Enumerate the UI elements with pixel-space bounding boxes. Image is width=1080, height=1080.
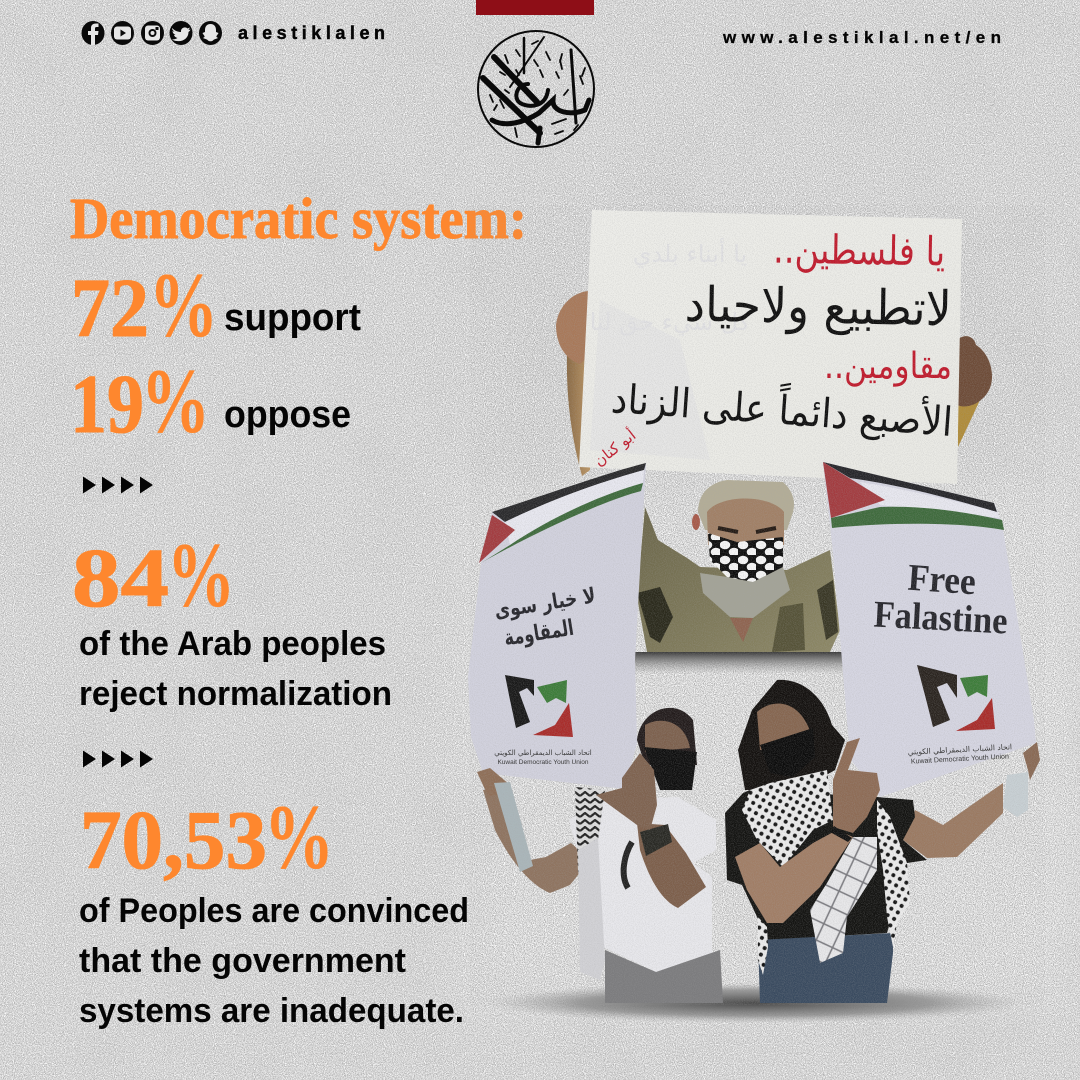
icon: snapchat bbox=[199, 21, 222, 45]
stat: 72% support bbox=[71, 254, 361, 356]
stat: 70,53% bbox=[79, 786, 469, 1030]
icon: facebook bbox=[82, 21, 104, 45]
face bbox=[757, 703, 814, 750]
photo collage: protesters bbox=[468, 205, 1045, 1023]
placard: right, Free Falastine: Free bbox=[906, 557, 977, 603]
jeans bbox=[758, 933, 893, 1003]
keffiyeh mask bbox=[708, 533, 783, 582]
stat: 19% oppose bbox=[70, 350, 351, 452]
forearm bbox=[637, 823, 706, 908]
stat: 84%: reject normalization bbox=[79, 675, 392, 713]
ground shadow bbox=[485, 983, 1025, 1023]
icon: twitter bbox=[170, 21, 192, 45]
stat: 72% support: % bbox=[149, 254, 218, 356]
shorts bbox=[605, 950, 723, 1003]
stat: 70,53%: 70,53 bbox=[80, 794, 267, 887]
placard: right, Free Falastine: Falastine bbox=[873, 594, 1009, 642]
stat: 84%: % bbox=[167, 524, 235, 626]
flag on placard bbox=[823, 462, 1004, 530]
placard: right, Free Falastine bbox=[823, 462, 1036, 797]
placard logo bbox=[917, 665, 995, 731]
glasses bbox=[624, 842, 632, 888]
top red bar bbox=[476, 0, 594, 15]
placard: left, flag and logo: المقاومة bbox=[502, 616, 576, 651]
left woman bbox=[483, 708, 723, 1003]
placard: left, flag and logo: اتحاد الشباب الديمقراطي الكويتي bbox=[494, 749, 592, 757]
placard: right, Free Falastine: Kuwait Democratic Youth Union bbox=[911, 753, 1009, 766]
scarf bbox=[575, 787, 605, 872]
logo: calligraphy roundel bbox=[478, 31, 594, 147]
website url: www.alestiklal.net/en bbox=[722, 28, 1001, 47]
placard: Arabic slogan: مقاومين.. bbox=[824, 346, 952, 387]
left woman's right hand bbox=[596, 753, 657, 830]
stat: 70,53%: % bbox=[264, 786, 334, 888]
placard: left, flag and logo bbox=[468, 463, 646, 789]
placard: Arabic slogan: يا فلسطين.. bbox=[773, 227, 946, 275]
stat: 19% oppose: oppose bbox=[224, 394, 351, 436]
stat: 70,53%: of Peoples are convinced bbox=[79, 892, 469, 930]
left woman's bottle and hand bbox=[477, 768, 510, 796]
hair bbox=[738, 680, 845, 790]
stat: 70,53%: that the government bbox=[79, 942, 406, 980]
faint ghost writing: كل شيء حق لنا bbox=[590, 308, 751, 336]
stat: 84%: 84 bbox=[72, 532, 169, 625]
black mask bbox=[644, 747, 697, 790]
man shadow bbox=[634, 652, 848, 674]
right arm bbox=[903, 783, 1003, 858]
arm and bottle bbox=[483, 790, 590, 893]
forearm bbox=[735, 830, 853, 923]
headline: Democratic system: bbox=[70, 186, 527, 251]
keffiyeh: neck bbox=[742, 770, 833, 867]
social handle: alestiklalen bbox=[238, 23, 385, 43]
shirt bbox=[637, 507, 840, 652]
black shirt bbox=[725, 790, 927, 940]
beard bbox=[700, 567, 790, 618]
placard: left, flag and logo: لا خيار سوى bbox=[493, 583, 597, 623]
keffiyeh: long bands bbox=[810, 837, 877, 963]
right woman's bottle and hand bbox=[1003, 772, 1028, 817]
stat: 19% oppose: % bbox=[141, 350, 210, 452]
stat: 84% bbox=[72, 524, 392, 713]
placard: Arabic slogan: أبو كنان bbox=[590, 425, 639, 470]
placard logo bbox=[505, 675, 573, 737]
stat: 70,53%: systems are inadequate. bbox=[79, 992, 464, 1030]
faint ghost writing bbox=[590, 238, 751, 336]
hair bbox=[637, 708, 697, 765]
placard: Arabic slogan: لاتطبيع ولاحياد bbox=[684, 277, 952, 337]
stat: 84%: of the Arab peoples bbox=[79, 625, 386, 663]
placard: Arabic slogan: الأصبع دائماً على الزناد bbox=[610, 369, 955, 446]
chest bbox=[730, 618, 753, 642]
face bbox=[707, 498, 784, 545]
icon: youtube bbox=[111, 21, 134, 45]
stat: 72% support: support bbox=[224, 297, 361, 339]
hair bbox=[698, 480, 794, 530]
flag on placard bbox=[479, 463, 646, 563]
placard: left, flag and logo: Kuwait Democratic Youth Union bbox=[497, 759, 589, 766]
right hand bbox=[957, 336, 992, 406]
icon: instagram bbox=[141, 21, 164, 45]
stat: 19% oppose: 19 bbox=[70, 358, 144, 451]
placard: right, Free Falastine: اتحاد الشباب الديمقراطي الكويتي bbox=[907, 742, 1012, 757]
right woman's right hand bbox=[833, 738, 880, 833]
shirt shadows and print bbox=[637, 587, 673, 643]
left hand bbox=[556, 291, 596, 364]
women holding placards bbox=[483, 680, 1003, 1003]
faint ghost writing: يا أبناء بلدي bbox=[633, 238, 747, 268]
man holding sign bbox=[556, 291, 992, 652]
white t-shirt bbox=[569, 797, 716, 972]
left arm bbox=[567, 355, 592, 476]
black mask bbox=[760, 728, 815, 777]
right woman bbox=[725, 680, 1003, 1003]
right arm bbox=[958, 400, 980, 447]
stat: 72% support: 72 bbox=[71, 262, 149, 355]
face bbox=[645, 721, 690, 752]
ear bbox=[692, 514, 700, 530]
social icons row bbox=[82, 21, 222, 45]
hands over placards and bottles bbox=[477, 738, 1040, 872]
arrows bbox=[83, 476, 153, 494]
placard: Arabic slogan bbox=[579, 210, 962, 484]
arrows bbox=[83, 750, 153, 768]
